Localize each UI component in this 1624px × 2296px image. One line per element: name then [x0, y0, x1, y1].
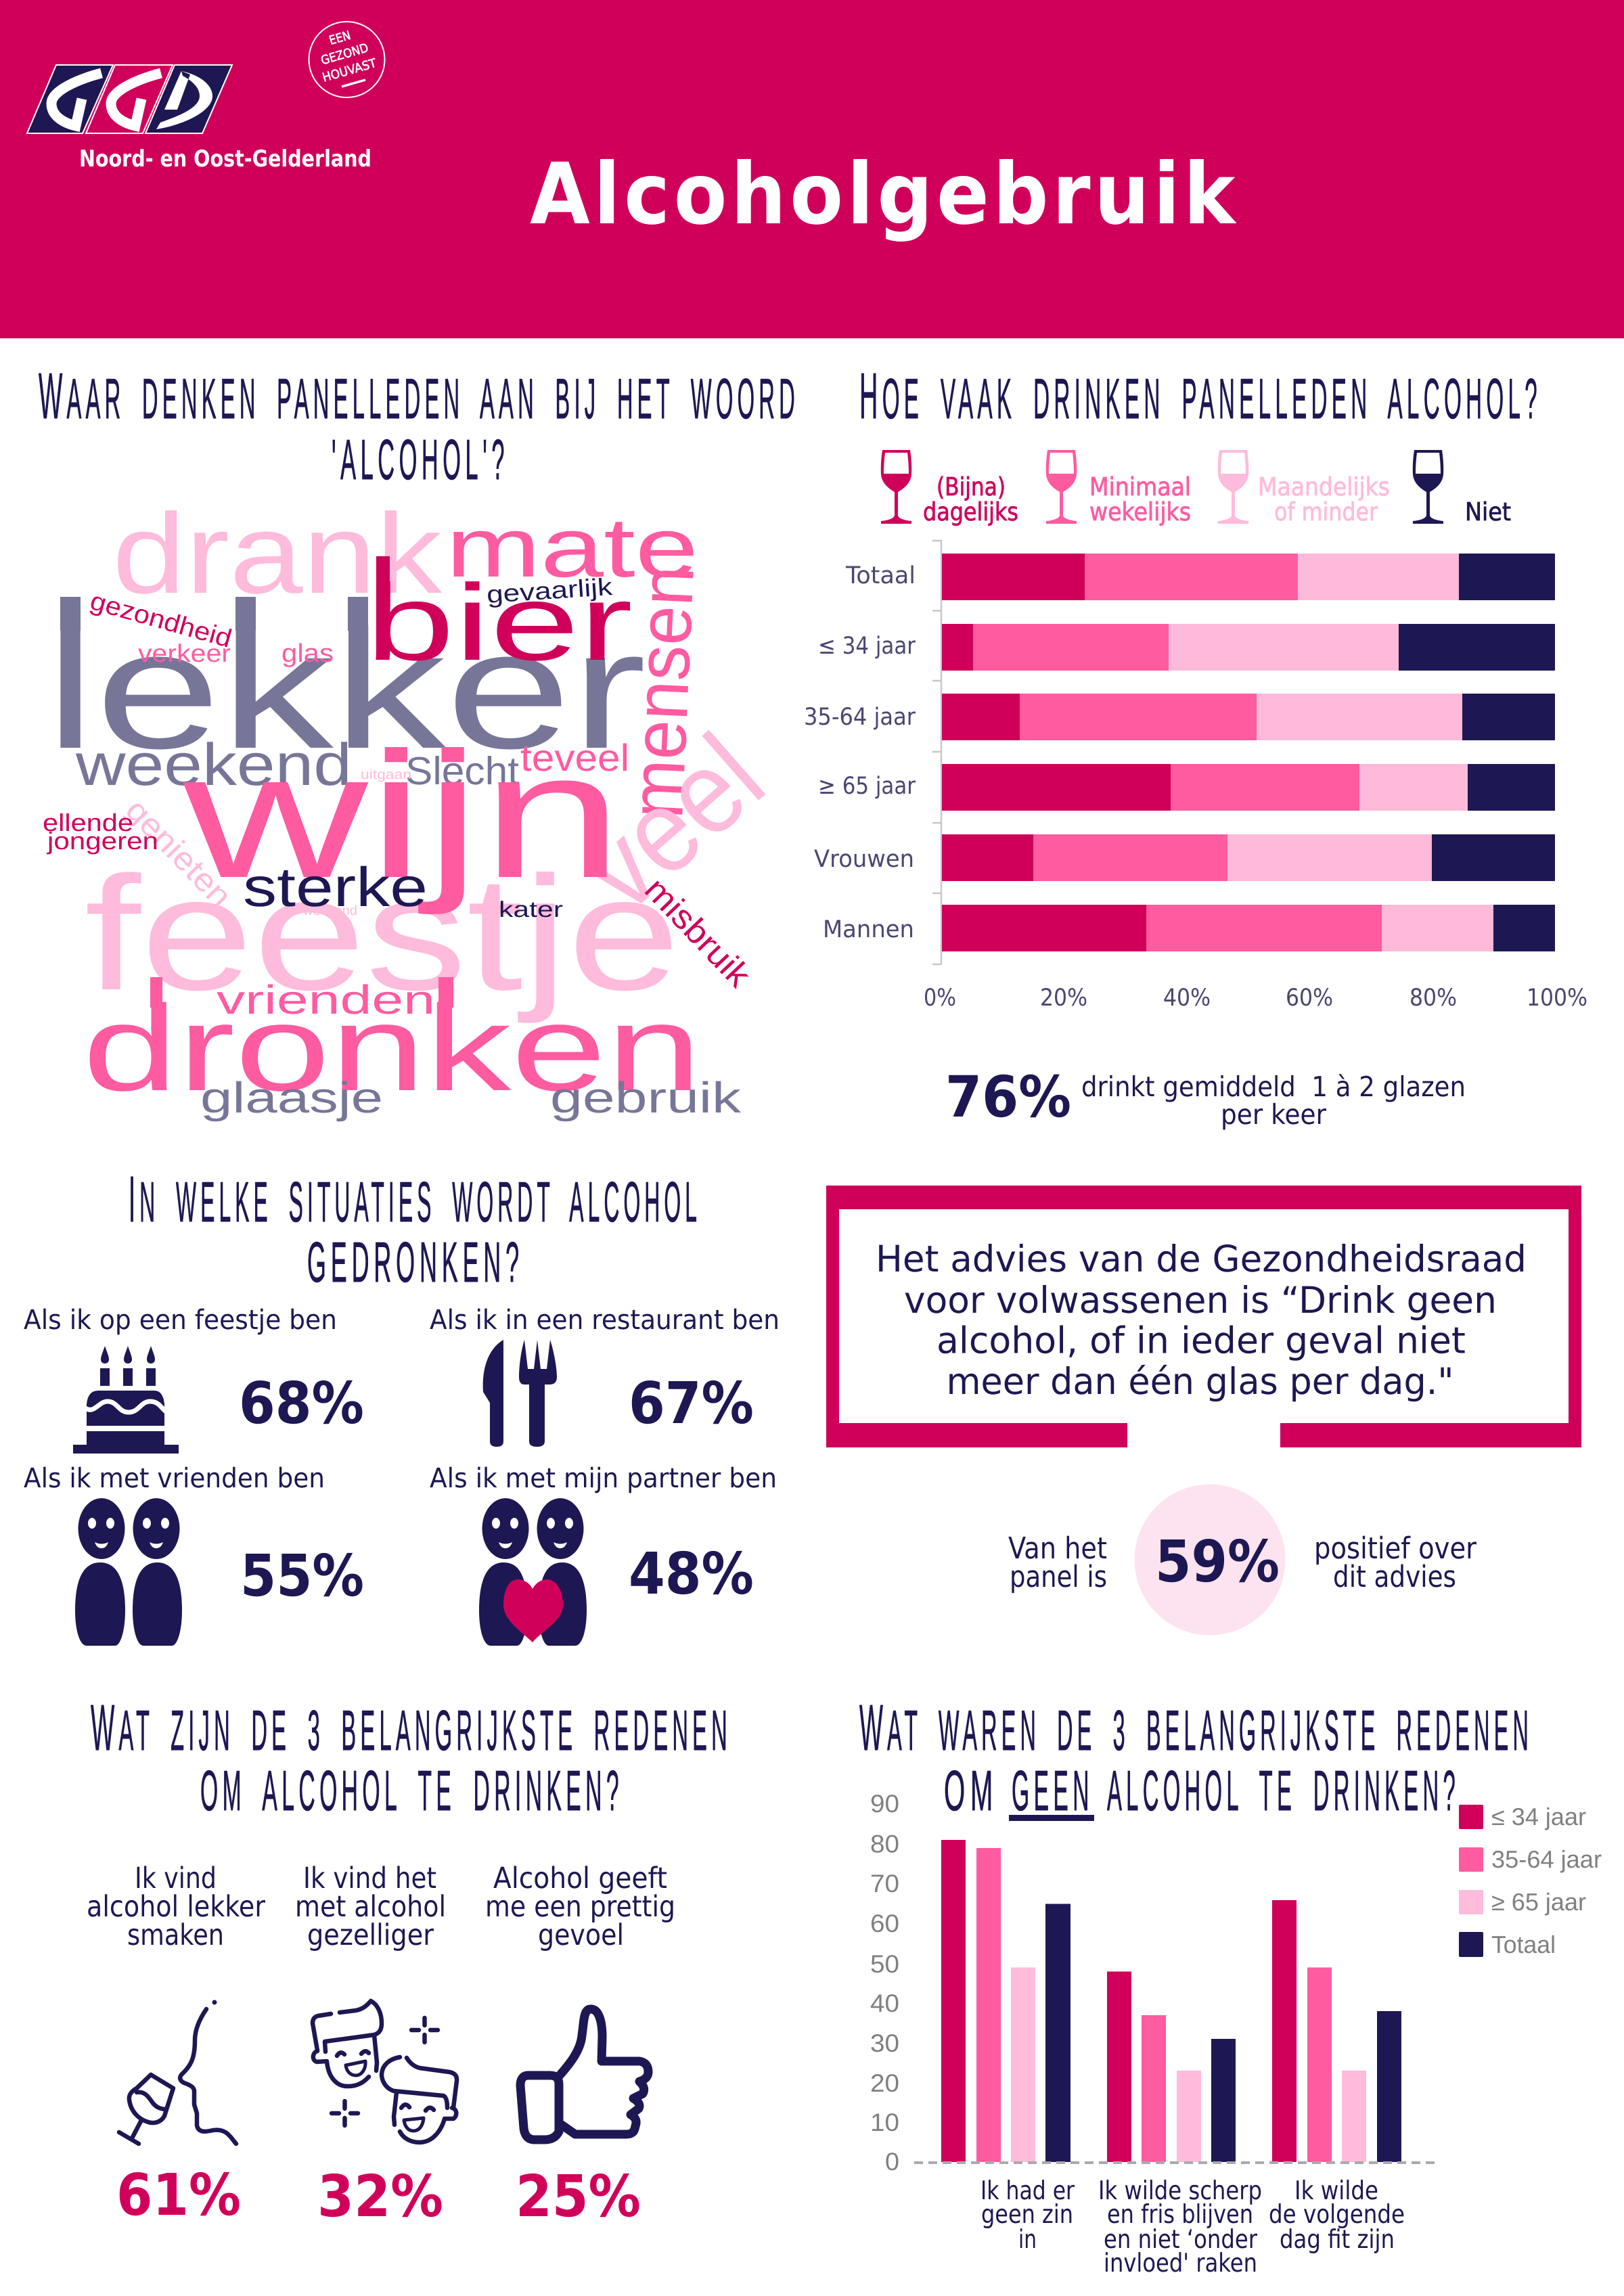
bar: 34 jaar or younger [942, 624, 1555, 671]
panel: restaurant: 67% [629, 1370, 754, 1437]
axis labels: 100% [1527, 985, 1587, 1012]
bars: group 1 [941, 1840, 1070, 2162]
word cloud: teveel [520, 736, 629, 779]
word cloud: sterke [243, 857, 428, 918]
label: monthly: of minder [1274, 497, 1378, 526]
stacked bar chart [804, 541, 1587, 1012]
bar: Totaal [942, 554, 1555, 600]
axis labels: 0% [924, 985, 956, 1012]
text: IN WELKE SITUATIES WORDT ALCOHOL [129, 1163, 701, 1236]
icon: glass daily [881, 450, 911, 524]
panel: reason 1: smaken [127, 1918, 224, 1952]
panel: partner [430, 1463, 777, 1646]
heading: reasons not to drink [859, 1692, 1533, 1822]
panel: reason 2: 32% [317, 2163, 443, 2230]
stat: 76%: 76% [945, 1064, 1071, 1130]
header banner [0, 0, 1624, 338]
category labels: geen zin [981, 2199, 1073, 2229]
chart legend: ≥ 65 jaar [1491, 1888, 1586, 1916]
panel: reason 2: met alcohol [295, 1890, 446, 1924]
category labels: Mannen [823, 916, 914, 943]
category labels [804, 562, 916, 943]
chart legend: 35-64 jaar [1491, 1845, 1602, 1873]
word cloud: glaasje [200, 1073, 383, 1122]
word cloud: uitgaan [361, 767, 411, 782]
word cloud [43, 490, 788, 1122]
advice text: voor volwassenen is “Drink geen [904, 1279, 1497, 1322]
panel: party: 68% [239, 1370, 364, 1437]
panel: friends: 55% [240, 1543, 364, 1610]
word cloud: mate [446, 501, 698, 595]
y axis labels: 90 [870, 1790, 899, 1818]
legend: drinking frequency [881, 450, 1511, 526]
y axis labels: 10 [870, 2109, 899, 2136]
stat: 76% [945, 1064, 1466, 1131]
panel: restaurant: Als ik in een restaurant ben [430, 1305, 780, 1336]
label: daily: (Bijna) [937, 472, 1006, 501]
panel: reason 2: Ik vind het [303, 1862, 436, 1895]
icon: cutlery [483, 1340, 557, 1447]
panel: party: Als ik op een feestje ben [24, 1305, 337, 1336]
word cloud: dronken [83, 981, 702, 1117]
category labels: Ik wilde [1294, 2176, 1378, 2205]
logo subtitle: Noord- en Oost-Gelderland [79, 145, 371, 173]
label: never: Niet [1465, 497, 1511, 526]
word cloud: drank [112, 490, 443, 617]
bar chart: reasons not to drink [870, 1790, 1602, 2278]
panel: reason 3: me een prettig [485, 1890, 675, 1924]
icon: two laughing friends [313, 2001, 457, 2142]
chart legend: Totaal [1491, 1931, 1556, 1958]
category labels: dag fit zijn [1280, 2224, 1395, 2254]
word cloud: bier [365, 562, 633, 683]
y axis labels: 60 [870, 1910, 899, 1937]
y axis labels: 30 [870, 2029, 899, 2057]
panel: reason 1: Ik vind [135, 1862, 217, 1895]
bar: 35-64 jaar [942, 694, 1555, 740]
word cloud: mensen [614, 564, 710, 820]
heading: reasons not to drink: GEEN [1012, 1759, 1093, 1822]
word cloud: feestje [85, 842, 680, 1024]
word cloud: gevaarlijk [486, 572, 614, 608]
heading: reasons not to drink: OM [944, 1759, 998, 1822]
heading: situations: GEDRONKEN? [307, 1230, 524, 1294]
panel: party [24, 1305, 364, 1454]
axis labels: 60% [1286, 985, 1333, 1012]
word cloud: weekend [302, 903, 357, 918]
word cloud: weekend [75, 731, 352, 798]
title: Alcoholgebruik [530, 145, 1239, 244]
icon: glass weekly [1046, 450, 1077, 524]
word cloud: genieten [118, 792, 238, 915]
panel: reason 3 [485, 1862, 675, 2230]
word cloud: ellende [43, 809, 133, 836]
category labels: ≥ 65 jaar [818, 773, 916, 800]
category labels: Ik had er [980, 2176, 1075, 2205]
word cloud: vrienden [217, 977, 435, 1022]
panel: reason 1: alcohol lekker [87, 1890, 265, 1924]
icon: two people [75, 1498, 182, 1646]
stamp: een gezond houvast: GEZOND [319, 41, 370, 68]
chart legend [1459, 1803, 1602, 1958]
word cloud: kater [499, 897, 563, 922]
heading: reasons to drink [91, 1692, 731, 1822]
axis labels: 20% [1040, 985, 1087, 1012]
label: monthly: Maandelijks [1258, 472, 1390, 501]
label: weekly: wekelijks [1089, 497, 1191, 526]
advice text: alcohol, of in ieder geval niet [937, 1320, 1466, 1361]
advice text: Het advies van de Gezondheidsraad [876, 1238, 1527, 1280]
panel: restaurant [430, 1305, 780, 1447]
label: daily [923, 472, 1018, 526]
callout: advice box [826, 1186, 1581, 1447]
panel: reason 3: gevoel [538, 1918, 624, 1952]
word cloud: gebruik [550, 1073, 742, 1122]
stat: 76%: per keer [1221, 1098, 1326, 1131]
bar: 65 jaar or older [942, 764, 1555, 811]
category labels: invloed' raken [1104, 2248, 1257, 2278]
icon: glass monthly [1218, 450, 1248, 524]
label: weekly [1089, 472, 1191, 526]
heading: situations [129, 1163, 701, 1294]
bar: Mannen [942, 905, 1555, 951]
category labels: de volgende [1269, 2199, 1405, 2229]
word cloud: jongeren [47, 827, 158, 855]
word cloud: gezondheid [87, 587, 235, 654]
panel: reason 3: 25% [516, 2163, 641, 2230]
chart legend: ≤ 34 jaar [1491, 1803, 1586, 1830]
panel: friends [24, 1463, 364, 1646]
stamp: een gezond houvast: HOUVAST [321, 56, 379, 85]
stamp: een gezond houvast [309, 22, 384, 97]
bar: Vrouwen [942, 834, 1555, 881]
label: weekly: Minimaal [1089, 472, 1191, 501]
icon: thumbs up [520, 2009, 648, 2140]
panel: reason 2: gezelliger [307, 1918, 434, 1952]
panel: reason 3: Alcohol geeft [493, 1862, 667, 1895]
axis labels: 40% [1163, 985, 1211, 1012]
stat: 59%: positief over [1314, 1531, 1477, 1566]
y axis labels: 50 [870, 1950, 899, 1978]
word cloud: lekker [45, 595, 646, 784]
category labels: ≤ 34 jaar [818, 633, 916, 660]
advice text [876, 1238, 1527, 1403]
heading: word cloud: 'ALCOHOL'? [332, 428, 509, 491]
y axis labels: 0 [885, 2148, 899, 2176]
stat: 59% [1008, 1485, 1477, 1635]
stat: 59%: dit advies [1333, 1560, 1456, 1594]
panel: reason 1: 61% [116, 2162, 241, 2229]
panel: partner: 48% [629, 1541, 754, 1608]
heading: reasons to drink: OM ALCOHOL TE DRINKEN? [200, 1759, 623, 1822]
word cloud: misbruik [637, 870, 759, 995]
y axis labels [870, 1790, 899, 2176]
category labels: Vrouwen [814, 846, 914, 873]
bars: group 2 [1107, 1972, 1236, 2162]
stat: 59%: Van het [1008, 1531, 1107, 1566]
word cloud: wijn [179, 715, 623, 916]
word cloud: verkeer [138, 639, 231, 667]
category labels: in [1018, 2224, 1037, 2254]
panel: reason 2 [295, 1862, 457, 2230]
word cloud: Slecht [405, 749, 519, 793]
label: monthly [1258, 472, 1390, 526]
category labels: Totaal [845, 562, 916, 589]
icon: cake [73, 1346, 179, 1454]
y axis labels: 70 [870, 1870, 899, 1897]
panel: partner: Als ik met mijn partner ben [430, 1463, 777, 1494]
panel: friends: Als ik met vrienden ben [24, 1463, 325, 1494]
category labels [980, 2176, 1405, 2278]
heading: word cloud [39, 360, 799, 491]
icon: wine and nose [119, 2000, 236, 2144]
category labels: en fris blijven [1107, 2199, 1253, 2229]
icon: couple with heart [479, 1498, 587, 1646]
icon: glass never [1413, 450, 1443, 524]
advice text: meer dan één glas per dag." [946, 1360, 1453, 1403]
stat: 76%: drinkt gemiddeld 1 à 2 glazen [1081, 1071, 1466, 1103]
panel: reason 1 [87, 1862, 265, 2229]
word cloud: glas [281, 639, 334, 668]
word cloud: veel [556, 710, 788, 937]
stat: 59%: panel is [1010, 1560, 1107, 1594]
label: daily: dagelijks [923, 497, 1018, 526]
stat: 59%: 59% [1155, 1529, 1280, 1596]
stamp: een gezond houvast: EEN [328, 28, 353, 48]
y axis labels: 80 [870, 1830, 899, 1858]
category labels: Ik wilde scherp [1098, 2176, 1262, 2205]
axis labels [924, 985, 1587, 1012]
y axis labels: 20 [870, 2069, 899, 2097]
axis labels: 80% [1409, 985, 1457, 1012]
category labels: en niet ‘onder [1104, 2224, 1257, 2254]
logo: GGD [27, 65, 232, 133]
category labels: 35-64 jaar [804, 704, 916, 731]
bars: group 3 [1272, 1900, 1401, 2162]
y axis labels: 40 [870, 1989, 899, 2017]
